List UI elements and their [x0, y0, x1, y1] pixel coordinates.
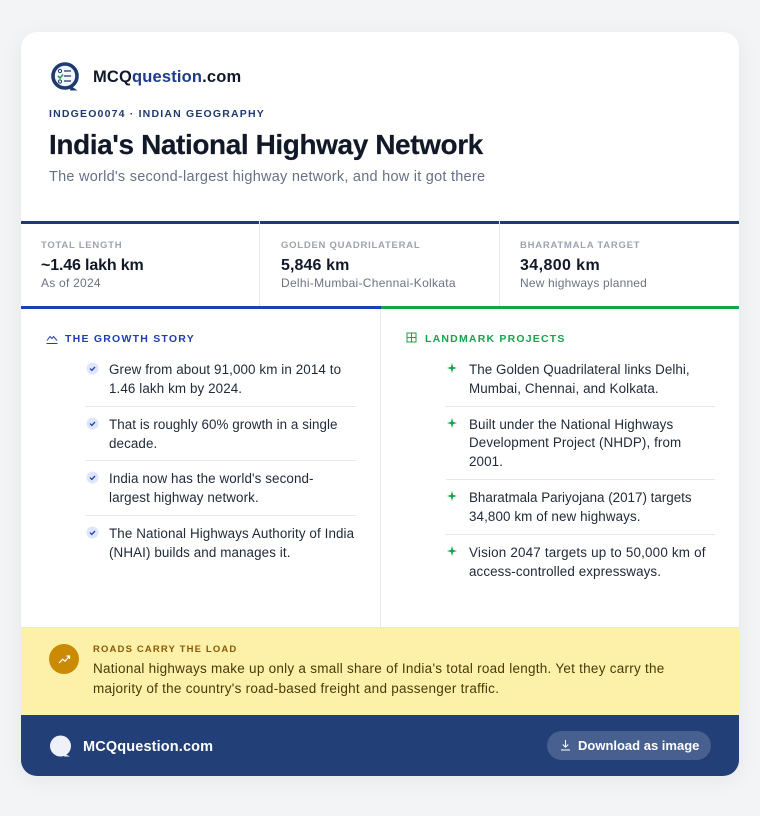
icon: grid — [406, 332, 416, 342]
callout — [21, 627, 739, 715]
stat: total length: ~1.46 lakh km — [41, 257, 144, 274]
footer — [21, 715, 739, 776]
item 4 — [447, 545, 706, 579]
item 2 — [86, 417, 338, 451]
item 4: access-controlled expressways. — [469, 564, 661, 579]
icon: sparkle — [447, 363, 457, 373]
stat: golden quadrilateral: GOLDEN QUADRILATERAL — [281, 240, 420, 251]
item 4: The National Highways Authority of India — [109, 526, 354, 541]
icon: check — [86, 362, 98, 374]
panel: growth story — [21, 306, 381, 628]
item 2: Built under the National Highways — [469, 417, 673, 432]
callout text: majority of the country's road-based freight and passenger traffic. — [93, 681, 499, 696]
item 1: 1.46 lakh km by 2024. — [109, 381, 242, 396]
title: India's National Highway Network — [49, 129, 483, 160]
item 3 — [447, 490, 692, 524]
icon: check — [86, 418, 98, 430]
stat: bharatmala target: 34,800 km — [520, 257, 600, 274]
item 2 — [447, 417, 681, 469]
icon: mountain chart — [46, 336, 58, 344]
item 4: Vision 2047 targets up to 50,000 km of — [469, 545, 706, 560]
item 3: India now has the world's second- — [109, 471, 314, 486]
download button — [547, 731, 711, 760]
icon: quiz speech bubble — [51, 62, 79, 90]
icon: sparkle — [447, 546, 457, 556]
item 2: decade. — [109, 436, 157, 451]
subtitle: The world's second-largest highway network, and how it got there — [49, 169, 485, 185]
stat: golden quadrilateral — [281, 240, 456, 290]
icon: check — [86, 526, 98, 538]
callout heading: ROADS CARRY THE LOAD — [93, 644, 237, 655]
heading: LANDMARK PROJECTS — [425, 333, 566, 345]
icon: sparkle — [447, 491, 457, 501]
item 3: largest highway network. — [109, 490, 259, 505]
stat: golden quadrilateral: Delhi-Mumbai-Chennai-Kolkata — [281, 276, 456, 290]
icon: footer logo — [50, 736, 71, 756]
stat: total length: As of 2024 — [41, 276, 101, 290]
stats strip — [21, 221, 739, 306]
icon: sparkle — [447, 418, 457, 428]
download button: Download as image — [578, 738, 699, 753]
brand logo — [51, 62, 241, 90]
item 3: 34,800 km of new highways. — [469, 509, 641, 524]
item 3: Bharatmala Pariyojana (2017) targets — [469, 490, 692, 505]
item 4 — [86, 526, 354, 560]
brand name: MCQquestion.com — [93, 68, 241, 86]
callout text: National highways make up only a small share of India's total road length. Yet they carry the — [93, 661, 665, 676]
stat: total length — [41, 240, 144, 290]
item 2: That is roughly 60% growth in a single — [109, 417, 338, 432]
item 1 — [447, 362, 690, 396]
item 4: (NHAI) builds and manages it. — [109, 545, 291, 560]
icon: check — [86, 472, 98, 484]
item 2: 2001. — [469, 454, 503, 469]
header text block — [49, 108, 485, 185]
stat: bharatmala target: New highways planned — [520, 276, 647, 290]
icon: trending up — [49, 644, 79, 674]
stat: golden quadrilateral: 5,846 km — [281, 257, 349, 274]
item 1: Grew from about 91,000 km in 2014 to — [109, 362, 341, 377]
stat: bharatmala target: BHARATMALA TARGET — [520, 240, 640, 251]
stat: bharatmala target — [520, 240, 647, 290]
panel: landmark projects — [381, 306, 739, 579]
icon: download — [561, 740, 570, 750]
callout text — [93, 661, 665, 696]
item 1 — [86, 362, 341, 396]
heading: THE GROWTH STORY — [65, 333, 195, 345]
footer brand: MCQquestion.com — [83, 739, 213, 755]
stat: total length: TOTAL LENGTH — [41, 240, 122, 251]
category tag: INDGEO0074 · INDIAN GEOGRAPHY — [49, 108, 265, 120]
item 1: Mumbai, Chennai, and Kolkata. — [469, 381, 659, 396]
item 1: The Golden Quadrilateral links Delhi, — [469, 362, 690, 377]
item 2: Development Project (NHDP), from — [469, 435, 681, 450]
item 3 — [86, 471, 314, 505]
